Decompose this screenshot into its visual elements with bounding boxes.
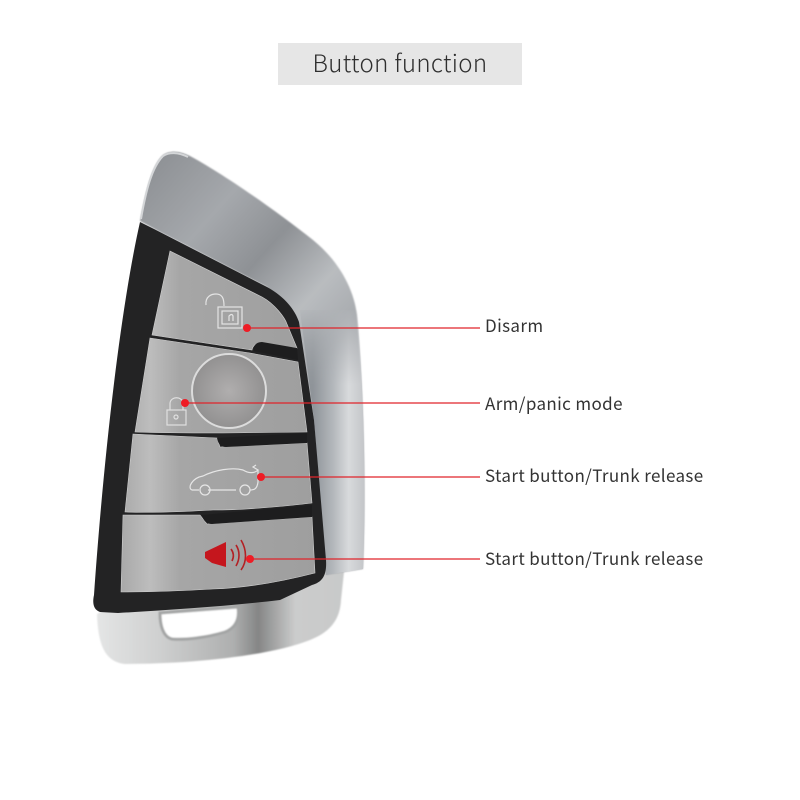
button 3: trunk <box>125 433 312 512</box>
button 1: unlock <box>152 251 298 360</box>
label: arm/panic mode: Arm/panic mode <box>485 390 623 415</box>
title: Button function <box>313 44 487 79</box>
callout line: disarm <box>243 324 480 332</box>
icon: open padlock <box>206 294 242 328</box>
callout line: arm/panic <box>181 399 480 407</box>
icon: red speaker <box>205 540 246 570</box>
button 2: arm <box>135 338 307 433</box>
key slot <box>160 607 238 639</box>
callout line: trunk <box>257 473 480 481</box>
dark slot 3 <box>217 433 307 447</box>
chrome right side shading <box>300 310 364 575</box>
callout line: panic button <box>246 555 480 563</box>
label: start button/trunk release second: Start button/Trunk release <box>485 545 704 570</box>
dark slot 4 <box>202 505 312 524</box>
title <box>278 43 522 85</box>
chrome top cap and right side <box>140 152 364 575</box>
round start button <box>192 354 266 428</box>
label: disarm: Disarm <box>485 312 543 337</box>
illustration: car key fob <box>93 150 480 664</box>
icon: closed padlock <box>167 398 186 425</box>
black body <box>93 222 326 613</box>
chrome base <box>97 560 344 664</box>
icon: car with open trunk <box>190 465 258 495</box>
label: start button/trunk release: Start button/Trunk release <box>485 462 704 487</box>
cap rim highlight <box>141 153 188 219</box>
button 4: panic <box>121 505 315 592</box>
dark slot 1 <box>254 342 298 360</box>
